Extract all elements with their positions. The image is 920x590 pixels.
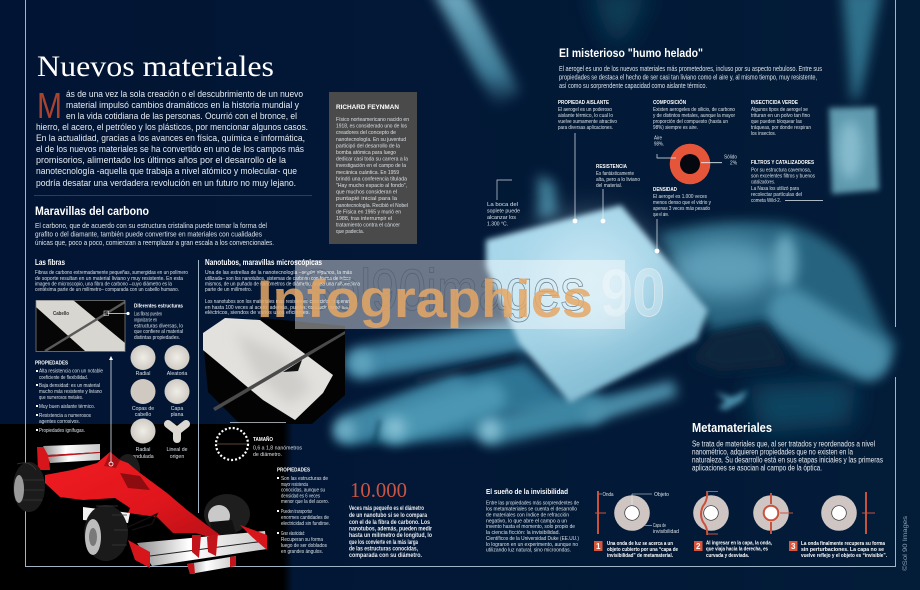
callout: soplete: alcanzar los <box>487 215 516 221</box>
stat: 10.000: hasta un milímetro de longitud, lo <box>349 532 432 539</box>
diagram step 1: onda se acerca: invisibilidad” de metamaterial. <box>607 553 673 559</box>
section: Maravillas del carbono: El carbono, que de acuerdo con su estructura cristalina puede tomar la forma del <box>35 221 267 230</box>
list: propiedades de los nanotubos: en grandes ángulos. <box>281 549 323 555</box>
section: Maravillas del carbono: Maravillas del carbono <box>35 206 149 218</box>
diagram step 2: onda curvada <box>693 491 772 559</box>
list: propiedades de las fibras: Muy buen aislante térmico. <box>39 404 95 410</box>
section: El sueño de la invisibilidad: negativo, lo que abre el campo a un <box>486 518 567 524</box>
diagram step 1: onda se acerca: Una onda de luz se acerca a un <box>607 541 673 547</box>
section: El misterioso humo helado <box>559 46 822 90</box>
panel: Richard Feynman: nanotecnología. En su juventud <box>336 137 406 143</box>
section: Nanotubos: Nanotubos, maravillas microscópicas <box>205 257 322 267</box>
callout: soplete: 1.300 °C. <box>487 222 508 228</box>
intro paragraph: nanotecnología -aquella que trabaja a nivel atómico y molecular- que <box>36 165 297 176</box>
diagram: estructuras de fibras: plana <box>171 412 183 418</box>
note: densidad: DENSIDAD <box>653 187 677 193</box>
diagram step 3: onda rodea el objeto <box>753 493 793 534</box>
stat: 10.000: Veces más pequeño es el diámetro <box>349 505 424 512</box>
section: El misterioso humo helado: así como su sorprendente capacidad como aislante térmico. <box>559 81 707 90</box>
section: Las fibras: centésima parte de un milímetro– comparada con un cabello humano. <box>35 287 179 293</box>
section: Metamateriales: nanométrico, adquieren propiedades que no existen en la <box>692 448 853 456</box>
note: filtros y catalizadores: recolectar partículas del <box>751 192 802 198</box>
diagram: tamaño del nanotubo <box>216 422 302 460</box>
section: El sueño de la invisibilidad <box>486 487 579 554</box>
list: propiedades de los nanotubos: Gran elasticidad: <box>281 531 305 537</box>
list: propiedades de los nanotubos: Recuperan su forma <box>281 537 324 543</box>
note: propiedad aislante: El aerogel es un poderoso <box>558 107 612 113</box>
section: El sueño de la invisibilidad: de materiales con índice de refracción <box>486 512 569 518</box>
note: resistencia: Es fantásticamente <box>596 171 634 177</box>
text: diferentes estructuras: Diferentes estructuras <box>134 304 183 310</box>
text: diferentes estructuras: estructuras diversas, lo <box>134 324 183 330</box>
list: propiedades de los nanotubos: menor que la del acero. <box>281 499 329 505</box>
stat: 10.000 <box>349 478 432 559</box>
section: Maravillas del carbono: únicas que, poco a poco, comienzan a reemplazar a gran escala a los convencionales. <box>35 238 274 247</box>
diagram: tamaño del nanotubo: TAMAÑO <box>253 436 274 443</box>
list: propiedades de las fibras: mucho más resistente y liviano <box>39 389 102 395</box>
diagram: estructuras de fibras: ondulada <box>132 454 154 460</box>
section: El sueño de la invisibilidad: Entre las propiedades más sorprendentes de <box>486 500 579 506</box>
note: densidad: menos denso que el vidrio y <box>653 200 711 206</box>
stat: 10.000: de las estructuras conocidas, <box>349 546 418 552</box>
list: propiedades de las fibras: coeficiente de flexibilidad. <box>39 375 88 381</box>
note: propiedad aislante: aislante térmico, lo cual lo <box>558 113 613 119</box>
diagram step 4: onda recupera su forma: La onda finalmente recupera su forma <box>801 541 886 547</box>
callout: soplete: La boca del <box>487 202 518 208</box>
intro paragraph: promisorios, alimentado los últimos años por el desarrollo de la <box>36 154 287 165</box>
panel: Richard Feynman: investigación en el campo de la <box>336 163 407 169</box>
text: diferentes estructuras <box>134 304 183 341</box>
note: filtros y catalizadores: son excelentes filtros y buenos <box>751 174 815 180</box>
leader line: fibra a coche <box>109 356 113 466</box>
panel: Richard Feynman: “Hay mucho espacio al fondo”, <box>336 183 407 189</box>
text: diferentes estructuras: organizarse en <box>134 318 157 324</box>
stat: 10.000: de un nanotubo si se lo compara <box>349 512 427 519</box>
panel: Richard Feynman: tratamiento contra el cáncer <box>336 223 400 229</box>
diagram step 4: onda recupera su forma: vuelve reflejo y el objeto es “invisible”. <box>801 553 887 559</box>
panel: Richard Feynman: puntapié inicial para la <box>336 196 398 202</box>
diagram step 1: onda se acerca: Onda <box>602 492 614 498</box>
section: Nanotubos: en hasta 100 veces al acero; además, pueden conducir como los <box>205 305 348 311</box>
stat: 10.000: 10.000 <box>350 478 407 502</box>
note: insecticida verde: tráqueas, por donde respiran <box>751 125 811 131</box>
section: Las fibras: Fibras de carbono extremadamente pequeñas, sumergidas en un polímero <box>35 270 188 276</box>
list: propiedades de los nanotubos: PROPIEDADES <box>277 468 310 474</box>
panel: Richard Feynman: participó del desarrollo de la <box>336 143 401 149</box>
list: propiedades de los nanotubos: Pueden transportar <box>281 509 312 515</box>
note: composición: proporción del compuesto (hasta un <box>653 119 728 125</box>
section: Las fibras <box>35 257 188 293</box>
section: Metamateriales: aplicaciones se asocian al campo de la óptica. <box>692 464 822 472</box>
stat: 10.000: con el de la fibra de carbono. Los <box>349 519 430 526</box>
panel: Richard Feynman: de Física en 1965 y murió en <box>336 209 401 215</box>
panel: Richard Feynman: RICHARD FEYNMAN <box>336 104 399 111</box>
text: diferentes estructuras: que confiere al material <box>134 329 183 335</box>
section: Nanotubos: utilizada– son los nanotubos, sistemas de carbono con forma de tubos <box>205 276 351 282</box>
list: propiedades de los nanotubos <box>277 468 330 555</box>
diagram: estructuras de fibras: Radial <box>136 371 150 377</box>
section: Nanotubos <box>205 257 361 316</box>
note: densidad <box>653 187 711 253</box>
section: Metamateriales: Se trata de materiales que, al ser tratados y reordenados a nivel <box>692 440 875 448</box>
section: El sueño de la invisibilidad: Científicos de la Universidad Duke (EE.UU.) <box>486 536 579 542</box>
list: propiedades de los nanotubos: conocidas, aunque su <box>281 488 325 494</box>
intro paragraph: En la actualidad, gracias a los avances en física, química e informática, <box>36 132 305 143</box>
microscope image: nanotubo <box>203 318 345 424</box>
note: insecticida verde: Algunos tipos de aerogel se <box>751 107 808 113</box>
list: propiedades de los nanotubos: densidad es 6 veces <box>281 494 320 500</box>
section: El sueño de la invisibilidad: utilizando luz natural, sino microondas. <box>486 548 571 554</box>
diagram: estructuras de fibras: Capa <box>171 406 183 412</box>
diagram step 2: onda curvada: Al ingresar en la capa, la onda, <box>706 540 772 546</box>
diagram: tamaño del nanotubo: 0,6 a 1,8 nanómetros <box>253 446 302 452</box>
microscope image: fibra y cabello <box>36 300 130 352</box>
diagram: estructuras de fibras: Lineal de <box>166 447 188 453</box>
note: filtros y catalizadores <box>751 160 823 204</box>
intro paragraph: material impulsó cambios dramáticos en la historia mundial y <box>66 99 299 110</box>
list: propiedades de las fibras: agentes corrosivos. <box>39 419 80 425</box>
panel: Richard Feynman <box>329 92 417 244</box>
section: Las fibras: de soporte resultan en un material liviano y muy resistente. En esta <box>35 276 184 282</box>
section: El sueño de la invisibilidad: la ciencia ficción: la invisibilidad. <box>486 530 560 536</box>
intro paragraph: en la vida cotidiana de las personas. Ocurrió con el bronce, el <box>66 110 297 121</box>
panel: Richard Feynman: brindó una conferencia titulada <box>336 176 408 182</box>
note: filtros y catalizadores: Por su estructura cavernosa, <box>751 168 811 174</box>
section: Nanotubos: Una de las estrellas de la nanotecnología –según algunos, la más <box>205 270 352 276</box>
diagram: estructuras de fibras: origen <box>170 454 184 460</box>
intro paragraph: podría desatar una verdadera revolución en un futuro no muy lejano. <box>36 177 296 188</box>
diagram: estructuras de fibras: Radial <box>136 447 150 453</box>
intro paragraph: ás de una vez la sola creación o el descubrimiento de un nuevo <box>66 88 303 99</box>
note: propiedad aislante: vuelve sumamente atractivo <box>558 119 617 125</box>
note: insecticida verde <box>751 100 811 137</box>
chart: donut aire / sólido: 98%. <box>654 142 664 148</box>
chart: donut aire / sólido: 2% <box>730 160 737 166</box>
section: El sueño de la invisibilidad: invento hasta el momento, solo propio de <box>486 524 575 530</box>
section: Metamateriales <box>692 420 883 472</box>
note: filtros y catalizadores: catalizadores. <box>751 180 775 186</box>
diagram step 2: onda curvada: curvada y desviada. <box>706 553 749 559</box>
section: Metamateriales: Metamateriales <box>692 420 772 435</box>
section: El misterioso humo helado: El aerogel es uno de los nuevos materiales más prometedores, incluso por su aspecto nebuloso. Entre sus <box>559 64 822 73</box>
watermark: Infographics <box>257 270 593 329</box>
note: resistencia: RESISTENCIA <box>596 164 627 170</box>
panel: Richard Feynman: creadores del concepto de <box>336 130 396 136</box>
list: propiedades de los nanotubos: Son las estructuras de <box>281 476 328 482</box>
note: insecticida verde: los insectos. <box>751 131 776 137</box>
diagram: tamaño del nanotubo: de diámetro. <box>253 452 282 458</box>
diagram step 1: onda se acerca: Capa de <box>653 523 666 529</box>
note: resistencia: del material. <box>596 183 622 189</box>
list: propiedades de las fibras: Resistencia a numerosos <box>39 413 91 419</box>
panel: Richard Feynman: que muchos consideran el <box>336 190 397 196</box>
panel: Richard Feynman: que padecía. <box>336 229 364 235</box>
diagram: estructuras de fibras: Aleatoria <box>167 371 187 377</box>
diagram step 1: onda se acerca: Objeto <box>654 492 669 498</box>
note: insecticida verde: que pueden bloquear las <box>751 119 802 125</box>
intro paragraph <box>36 85 308 188</box>
list: propiedades de las fibras: que numerosos metales. <box>39 395 83 401</box>
list: propiedades de las fibras <box>35 360 103 434</box>
list: propiedades de los nanotubos: luego de ser doblados <box>281 543 327 549</box>
title: Nuevos materiales <box>37 50 274 83</box>
diagram step 4: onda recupera su forma: sin perturbaciones. La capa no se <box>801 547 884 553</box>
panel: Richard Feynman: nanotecnología. Recibió el Nobel <box>336 203 408 209</box>
stat: 10.000: que los convierte en la más larga <box>349 539 418 546</box>
list: propiedades de las fibras: PROPIEDADES <box>35 360 68 366</box>
list: propiedades de los nanotubos: mayor resistencia <box>281 482 309 488</box>
drop cap: M <box>37 85 62 126</box>
section: Nanotubos: Los nanotubos son los materiales más resistentes conocidos: superan <box>205 299 350 305</box>
note: insecticida verde: INSECTICIDA VERDE <box>751 100 798 106</box>
diagram step 4: onda recupera su forma: 3 <box>791 542 796 551</box>
stat: 10.000: nanotubos, además, pueden medir <box>349 526 432 532</box>
list: propiedades de los nanotubos: enormes cantidades de <box>281 515 329 521</box>
illustration: red racing car <box>13 444 267 574</box>
diagram step 2: onda curvada: que viaja hacia la derecha, es <box>706 546 768 552</box>
diagram: estructuras de fibras: Copas de <box>132 406 154 412</box>
callout: soplete <box>487 180 520 228</box>
section: El sueño de la invisibilidad: El sueño de la invisibilidad <box>486 487 568 496</box>
note: filtros y catalizadores: cometa Wild-2. <box>751 198 781 204</box>
note: densidad: El aerogel es 1.000 veces <box>653 194 707 200</box>
diagram: estructuras de fibras: cabello <box>135 412 151 418</box>
diagram step 4: onda recupera su forma <box>789 492 887 559</box>
section: Nanotubos: parte de un milímetro. <box>205 287 252 293</box>
diagram step 1: onda se acerca: objeto cubierto por una “capa de <box>607 547 678 553</box>
diagram step 2: onda curvada: 2 <box>696 542 701 551</box>
section: El sueño de la invisibilidad: lo lograron en un experimento, aunque no <box>486 542 578 548</box>
panel: Richard Feynman: 1918, es considerado uno de los <box>336 124 407 130</box>
note: composición: y de distintos metales, aunque la mayor <box>653 113 735 119</box>
panel: Richard Feynman: dedicar casi toda su carrera a la <box>336 157 409 163</box>
list: propiedades de las fibras: Baja densidad: es un material <box>39 383 100 389</box>
section: El sueño de la invisibilidad: los metamateriales se cuenta el desarrollo <box>486 506 577 512</box>
note: densidad: que el aire. <box>653 212 669 218</box>
note: filtros y catalizadores: FILTROS Y CATALIZADORES <box>751 160 814 166</box>
list: propiedades de las fibras: Alta resistencia con un notable <box>39 368 103 374</box>
diagram: estructuras de fibras <box>130 345 190 460</box>
callout: soplete: soplete puede <box>487 208 520 214</box>
section: Nanotubos: mismos, de un puñado de nanómetros de diámetro, o sea una millonésima <box>205 282 361 288</box>
chart: donut aire / sólido: Sólido <box>724 154 737 160</box>
note: resistencia: alta, pero a lo liviano <box>596 177 640 183</box>
diagram step 1: onda se acerca: invisibilidad <box>653 529 679 535</box>
section: El misterioso humo helado: propiedades se destaca el hecho de ser casi tan liviano como el aire y, al mismo tiempo, muy resistente, <box>559 72 817 82</box>
text: diferentes estructuras: distintas propiedades. <box>134 335 180 341</box>
stat: 10.000: comparada con su diámetro. <box>349 552 422 559</box>
note: filtros y catalizadores: La Nasa los utilizó para <box>751 186 800 192</box>
panel: Richard Feynman: 1988, tras interrumpir el <box>336 216 392 222</box>
note: propiedad aislante: para diversas aplicaciones. <box>558 125 613 131</box>
section: Maravillas del carbono <box>35 206 274 247</box>
microscope image: fibra y cabello: Cabello <box>53 311 69 317</box>
watermark: Sol90images <box>300 258 585 323</box>
panel: Richard Feynman: Físico norteamericano nacido en <box>336 117 409 123</box>
list: propiedades de las fibras: Propiedades ignífugas. <box>39 428 85 434</box>
section: Maravillas del carbono: grafito o del diamante, también puede convertirse en materiales con cualidades <box>35 230 262 238</box>
credit: ©Sol 90 Images <box>901 515 909 571</box>
note: insecticida verde: trituran en un polvo tan fino <box>751 113 810 119</box>
list: propiedades de los nanotubos: electricidad sin fundirse. <box>281 521 330 527</box>
note: propiedad aislante: PROPIEDAD AISLANTE <box>558 100 609 106</box>
panel: Richard Feynman: bomba atómica para luego <box>336 150 396 156</box>
intro paragraph: hierro, el acero, el petróleo y los plásticos, por mencionar algunos casos. <box>36 121 308 132</box>
note: composición: COMPOSICIÓN <box>653 98 686 106</box>
chart: donut aire / sólido: Aire <box>654 136 662 142</box>
panel: Richard Feynman: mecánica cuántica. En 1959 <box>336 170 399 176</box>
note: propiedad aislante <box>558 100 617 223</box>
note: composición: Existen aerogeles de silicio, de carbono <box>653 107 735 113</box>
diagram step 1: onda se acerca: 1 <box>596 542 601 551</box>
note: resistencia <box>596 164 640 223</box>
diagram step 1: onda se acerca <box>594 491 679 559</box>
section: Las fibras: imagen de microscopio, una fibra de carbono –cuyo diámetro es la <box>35 282 173 288</box>
text: diferentes estructuras: Las fibras pueden <box>134 312 162 318</box>
note: densidad: apenas 3 veces más pesado <box>653 206 710 212</box>
note: composición: 98%) siempre es aire. <box>653 125 698 131</box>
section: El misterioso humo helado: El misterioso "humo helado" <box>559 46 703 60</box>
section: Las fibras: Las fibras <box>35 257 65 267</box>
watermark: 90 <box>600 255 665 331</box>
intro paragraph: el de los nuevos materiales se ha convertido en uno de los campos más <box>36 143 304 154</box>
section: Nanotubos: eléctricos, siendos de varios usos eficientes. <box>205 310 310 316</box>
note: composición <box>653 98 735 131</box>
chart: donut aire / sólido <box>654 136 737 184</box>
